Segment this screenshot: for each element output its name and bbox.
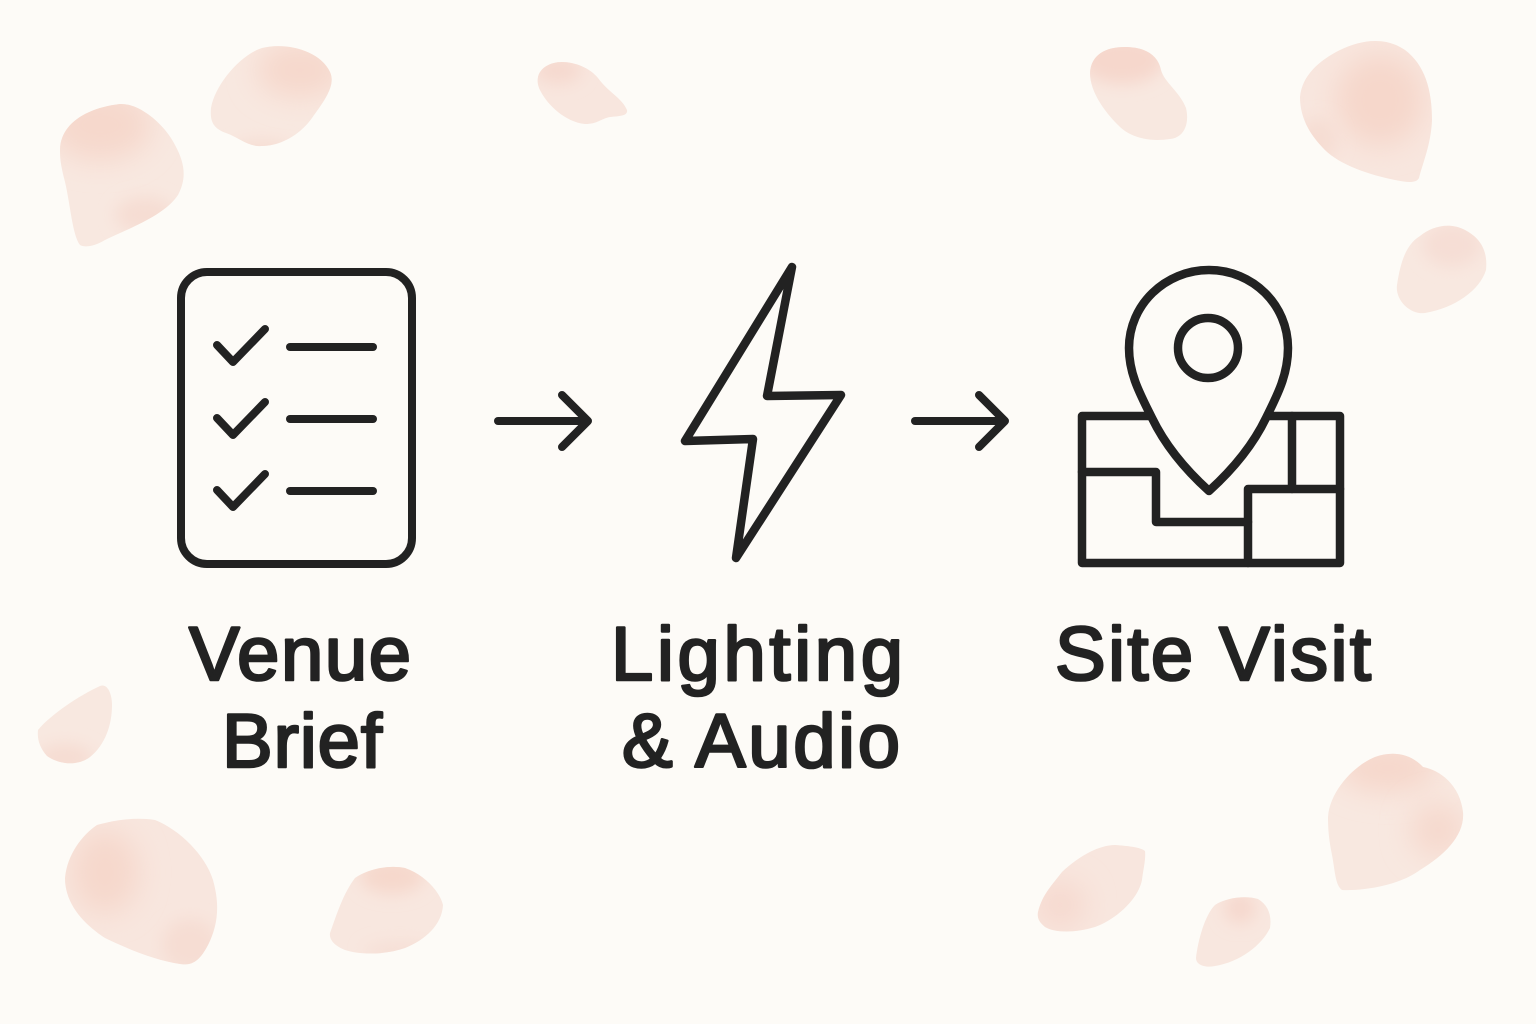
- arrow: brief to lighting: [498, 395, 588, 447]
- label: Site Visit: Site Visit: [1055, 612, 1371, 697]
- label: Lighting & Audio: Lighting: [611, 612, 903, 697]
- label: Lighting & Audio: [611, 612, 903, 784]
- icon: map with location pin: [1082, 270, 1340, 563]
- icon: checklist document: [181, 272, 412, 564]
- label: Lighting & Audio: & Audio: [622, 699, 900, 784]
- label: Venue Brief: Venue: [189, 612, 411, 697]
- arrow: lighting to site visit: [915, 395, 1005, 447]
- label: Venue Brief: Brief: [222, 699, 383, 784]
- label: Venue Brief: [189, 612, 411, 784]
- icon: lightning bolt: [685, 267, 841, 558]
